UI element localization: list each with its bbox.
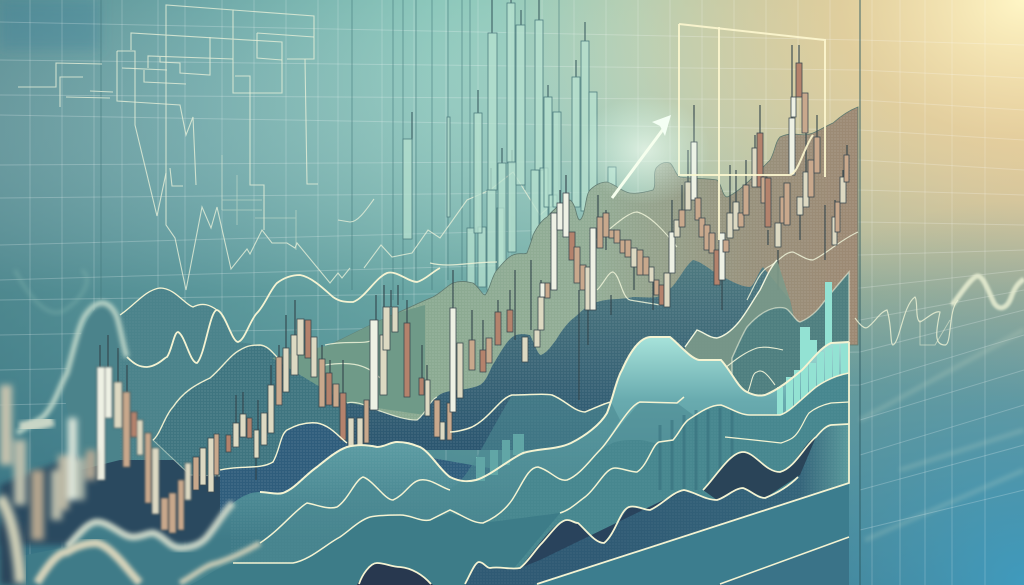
front area: darkest ridges — [357, 424, 849, 585]
dark navy base behind left candles — [0, 444, 345, 545]
dark teal left hill — [62, 288, 500, 520]
candlesticks — [97, 45, 849, 533]
right side wave, fading and blurred — [855, 276, 1024, 540]
wave outlines, sharp — [120, 268, 849, 584]
dark blue mid hill — [340, 260, 800, 450]
thin schematic lines, top left — [18, 5, 557, 290]
growth arrow — [580, 95, 710, 205]
candles: centre cluster — [370, 193, 596, 440]
faint blurred curve, left — [15, 270, 87, 313]
highlighted frame, top right — [679, 24, 825, 240]
background pale candlesticks — [403, 0, 616, 290]
candles: left cluster, soft focus — [97, 367, 191, 533]
candles: left-centre cluster — [193, 319, 369, 492]
olive and brown back hill — [330, 107, 858, 420]
mint bars along hill edge — [777, 344, 848, 420]
front area: right ridges with mint bars — [685, 260, 849, 400]
faint area lines over hills — [325, 212, 858, 420]
front area: lower ridge — [180, 373, 849, 585]
front area: teal ridge with big hill — [0, 337, 849, 585]
small mint bars in ridge — [476, 434, 524, 481]
blurred foreground candles, far left — [0, 385, 96, 585]
blurred foreground waves, far left — [0, 303, 260, 583]
candles: right cluster — [597, 63, 849, 307]
